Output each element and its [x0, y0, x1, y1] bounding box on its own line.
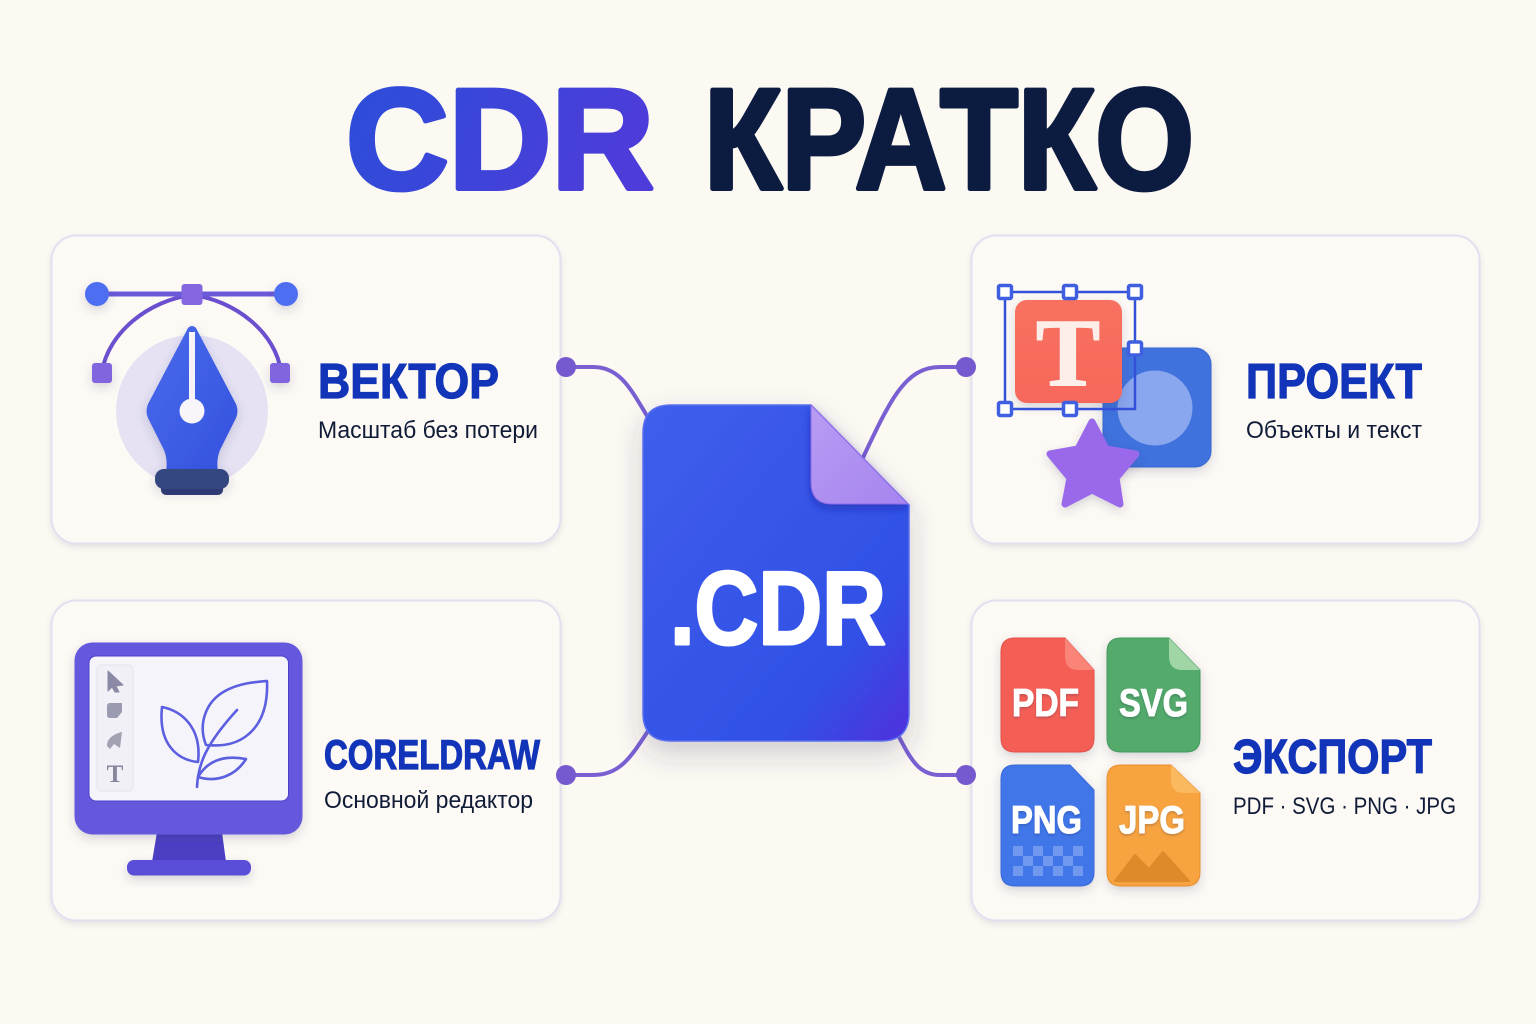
heading: vector: ВЕКТОР: [318, 355, 499, 409]
icon: JPG file: [1107, 765, 1200, 886]
connector dots: [556, 357, 976, 785]
icon: SVG file: [1107, 638, 1200, 752]
icon: central .CDR file: [643, 405, 909, 741]
text: vector subtitle: Масштаб без потери: [318, 417, 538, 444]
connectors: [566, 367, 966, 775]
icon: objects and text: T: [1036, 299, 1100, 406]
title: CDR: [346, 60, 654, 220]
heading: export: ЭКСПОРТ: [1233, 731, 1432, 784]
icon: PNG file: [1001, 765, 1094, 886]
icon: JPG file: JPG: [1119, 799, 1185, 842]
icon: PDF file: [1001, 638, 1094, 752]
icon: pen tool with bezier curve: [85, 282, 298, 495]
icon: PDF file: PDF: [1012, 682, 1079, 725]
title: КРАТКО: [704, 60, 1194, 220]
heading: coreldraw: CORELDRAW: [324, 731, 540, 778]
panel: export: [972, 600, 1480, 920]
panel: project: [972, 236, 1480, 544]
icon: PNG file: PNG: [1011, 799, 1082, 842]
text: .CDR label: .CDR: [670, 551, 886, 667]
heading: project: ПРОЕКТ: [1246, 355, 1422, 409]
icon: monitor with leaf artwork: [74, 642, 302, 876]
panel: vector: [52, 236, 560, 544]
text: project subtitle: Объекты и текст: [1246, 417, 1422, 444]
text: coreldraw subtitle: Основной редактор: [324, 787, 533, 814]
text: export subtitle: PDF · SVG · PNG · JPG: [1233, 793, 1456, 820]
title: [346, 60, 1194, 220]
icon: objects and text: [998, 286, 1211, 504]
icon: SVG file: SVG: [1119, 682, 1188, 725]
icon: monitor with leaf artwork: T: [107, 761, 124, 788]
panel: coreldraw: [52, 600, 560, 920]
